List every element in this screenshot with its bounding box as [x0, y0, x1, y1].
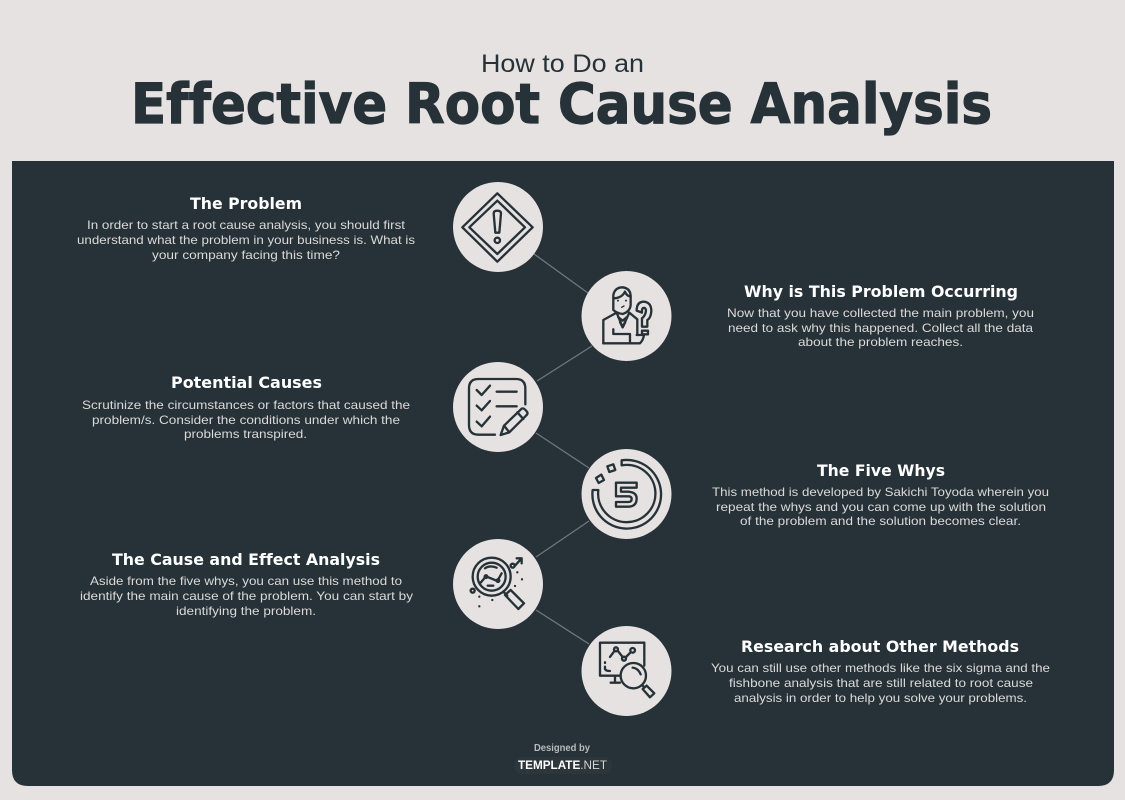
icon: magnifier over chart — [453, 539, 543, 629]
description — [80, 574, 413, 618]
description: fishbone analysis that are still related to root cause — [729, 676, 1033, 690]
subtitle: How to Do an — [481, 50, 644, 78]
main title: Effective Root Cause Analysis — [131, 72, 992, 136]
description: Aside from the five whys, you can use this method to — [90, 574, 402, 588]
step: The Five Whys text — [712, 461, 1049, 528]
description: of the problem and the solution becomes clear. — [740, 514, 1021, 528]
step: The Cause and Effect Analysis text — [80, 550, 413, 618]
step: The Problem text — [77, 194, 415, 262]
icon: checklist and pencil — [453, 362, 543, 452]
description: This method is developed by Sakichi Toyoda wherein you — [712, 485, 1049, 499]
description: problem/s. Consider the conditions under which the — [92, 413, 400, 427]
description — [77, 218, 415, 262]
heading: The Problem — [190, 194, 302, 213]
dark panel — [12, 161, 1114, 786]
connector lines — [534, 254, 592, 644]
heading: The Five Whys — [817, 461, 945, 480]
icon: monitor and magnifier — [582, 626, 672, 716]
description — [82, 398, 410, 441]
icon: warning diamond — [453, 182, 543, 272]
description: Now that you have collected the main problem, you — [727, 306, 1034, 320]
description: Scrutinize the circumstances or factors that caused the — [82, 398, 410, 412]
icon: person with question mark — [582, 271, 672, 361]
step: Research about Other Methods text — [711, 637, 1050, 705]
description — [727, 306, 1034, 349]
description — [711, 661, 1050, 705]
description — [712, 485, 1049, 528]
title block — [131, 50, 992, 136]
footer logo — [514, 743, 612, 774]
heading: Why is This Problem Occurring — [744, 282, 1018, 301]
logo wordmark: TEMPLATE.NET — [518, 758, 608, 772]
step: Why is This Problem Occurring text — [727, 282, 1034, 349]
step: Potential Causes text — [82, 373, 410, 441]
description: problems transpired. — [184, 427, 307, 441]
logo pill — [514, 757, 612, 774]
description: You can still use other methods like the six sigma and the — [711, 661, 1050, 675]
description: your company facing this time? — [152, 248, 340, 262]
description: analysis in order to help you solve your problems. — [734, 691, 1027, 705]
description: identify the main cause of the problem. You can start by — [80, 589, 413, 603]
description: about the problem reaches. — [798, 335, 963, 349]
icon: number five ring — [582, 449, 672, 539]
description: understand what the problem in your business is. What is — [77, 233, 415, 247]
designed by label: Designed by — [534, 743, 590, 754]
description: In order to start a root cause analysis, you should first — [87, 218, 406, 232]
heading: Research about Other Methods — [741, 637, 1019, 656]
heading: The Cause and Effect Analysis — [112, 550, 380, 569]
description: repeat the whys and you can come up with the solution — [716, 500, 1046, 514]
description: identifying the problem. — [176, 604, 316, 618]
heading: Potential Causes — [171, 373, 322, 392]
description: need to ask why this happened. Collect all the data — [728, 321, 1033, 335]
